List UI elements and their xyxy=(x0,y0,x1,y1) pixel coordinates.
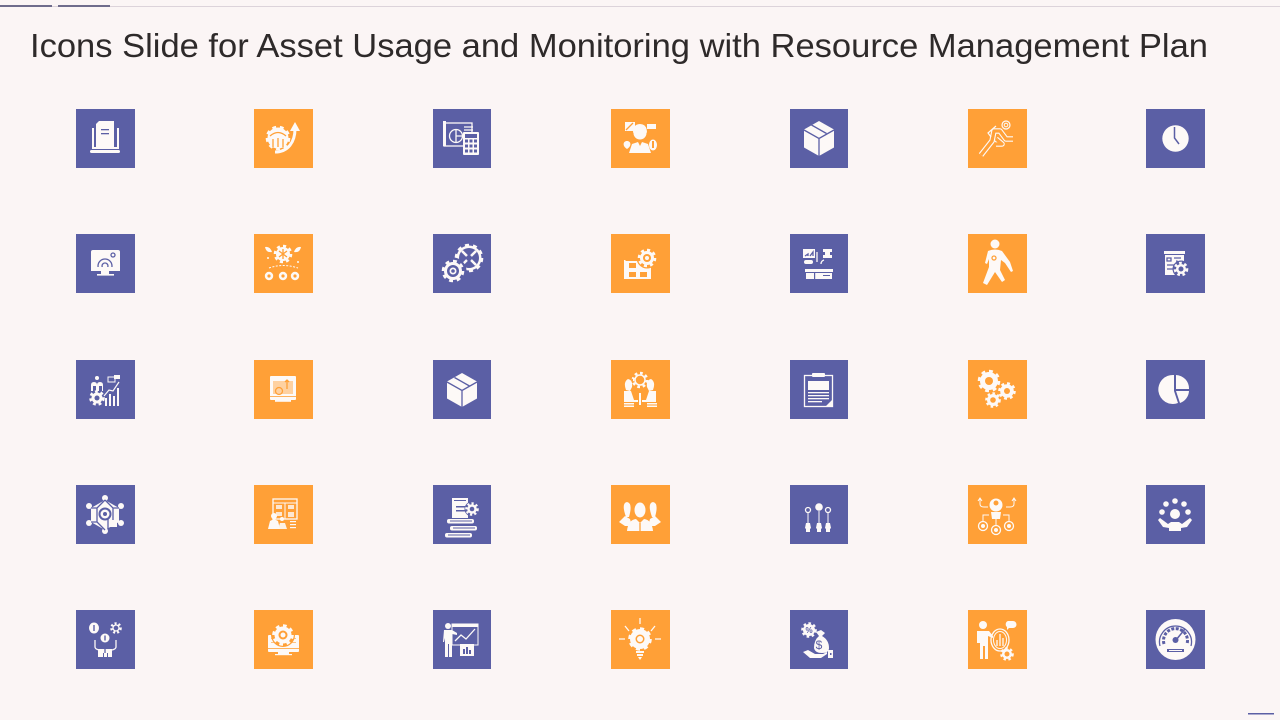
icon: analytics with open box xyxy=(790,234,848,293)
icon: three gears xyxy=(968,360,1027,419)
icon: blueprint with calculator xyxy=(433,109,491,168)
icon: lightbulb gear xyxy=(611,610,670,669)
icon: pie chart xyxy=(1146,360,1205,419)
icon: two people with gear xyxy=(611,360,670,419)
icon: money bag in hand xyxy=(790,610,848,669)
icon: flow plan with gear xyxy=(611,234,670,293)
icon: interlocking gears xyxy=(433,234,491,293)
icon: presenter with board xyxy=(254,485,313,544)
icon: network hexagon with gear xyxy=(76,485,135,544)
icon: team and chart with gear xyxy=(76,360,135,419)
icon: running silhouette xyxy=(968,234,1027,293)
icon: desktop gear settings xyxy=(254,610,313,669)
icon: money bag in hand: $ xyxy=(816,638,823,652)
icon: money bag in hand: % xyxy=(805,626,813,635)
icon: cardboard box xyxy=(790,109,848,168)
icon: monitor with upward arrows xyxy=(254,360,313,419)
icon: presenter with chart board xyxy=(433,610,491,669)
icon: person with money and gear xyxy=(76,610,135,669)
icon: person juggling circles xyxy=(1146,485,1205,544)
icon: idea person with connected nodes xyxy=(968,485,1027,544)
icon: running figure outline xyxy=(968,109,1027,168)
icon grid xyxy=(76,109,1205,669)
icon: clock xyxy=(1146,109,1205,168)
icon: person with chart and gear xyxy=(968,610,1027,669)
icon: gear with growth arrow xyxy=(254,109,313,168)
icon: clipboard report xyxy=(790,360,848,419)
icon: document with gear xyxy=(1146,234,1205,293)
icon: team of three people xyxy=(611,485,670,544)
icon: gear with leaves and people xyxy=(254,234,313,293)
icon: laptop with document xyxy=(76,109,135,168)
icon: three choice pins xyxy=(790,485,848,544)
icon: cardboard box front view xyxy=(433,360,491,419)
icon: manager with business items xyxy=(611,109,670,168)
icon: monitor with gear xyxy=(76,234,135,293)
icon: speedometer xyxy=(1146,610,1205,669)
icon: books with gear xyxy=(433,485,491,544)
title: Icons Slide for Asset Usage and Monitoring with Resource Management Plan xyxy=(30,27,1208,64)
